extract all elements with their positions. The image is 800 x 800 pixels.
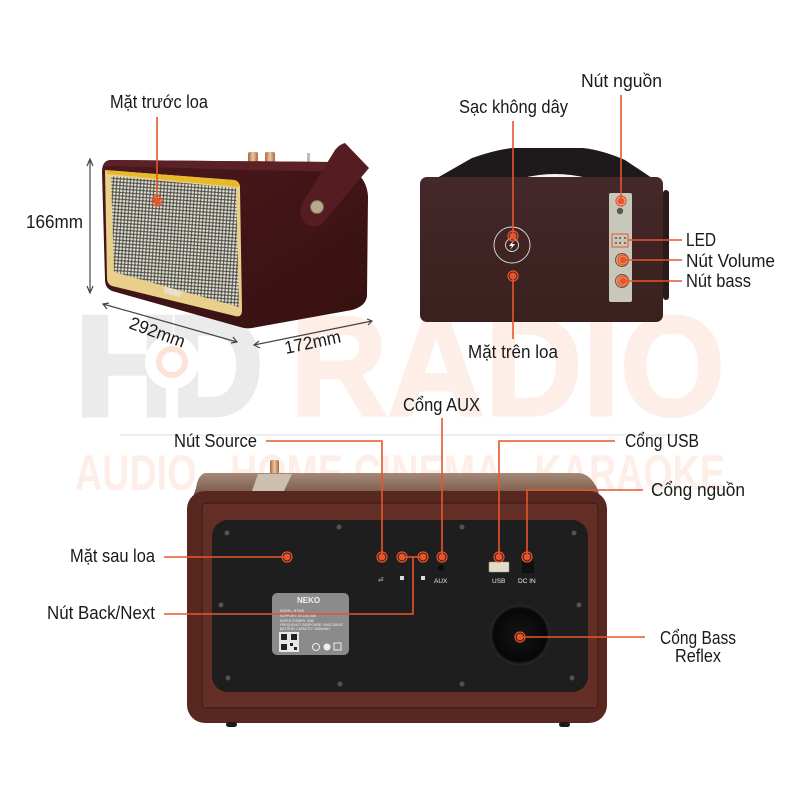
callout: Mặt trên loa xyxy=(468,271,559,362)
callout: Cổng nguồn: Cổng nguồn xyxy=(651,480,745,500)
bass reflex port xyxy=(490,605,550,665)
callout: Nút Source xyxy=(174,431,387,562)
callout: Nút bass: Nút bass xyxy=(686,271,751,291)
speaker knobs xyxy=(248,152,310,166)
callout: Nút Back/Next xyxy=(47,552,428,623)
port labels: DC IN xyxy=(518,578,536,585)
watermark: HD RADIO logo xyxy=(75,287,725,501)
callout: Cổng Bass Reflex xyxy=(515,628,736,666)
rating label: FREQUENCY RESPONSE: 20HZ-20KHZ xyxy=(280,623,343,627)
callout: Mặt trước loa xyxy=(110,92,209,206)
bass knob xyxy=(616,274,628,288)
callout: Nút nguồn xyxy=(581,71,662,206)
USB port xyxy=(489,562,509,572)
dimension: 172mm: 172mm xyxy=(283,326,343,358)
volume knob xyxy=(616,254,628,266)
panel: top view speaker xyxy=(420,148,669,322)
callout: LED xyxy=(628,230,716,250)
callout: Sạc không dây xyxy=(459,97,568,241)
callout: Sạc không dây: Sạc không dây xyxy=(459,97,568,117)
callout: Cổng AUX xyxy=(403,395,480,562)
wireless charging icon xyxy=(494,227,530,263)
callout: Nút bass xyxy=(618,271,751,291)
rear black panel xyxy=(212,520,588,692)
callout: Mặt trước loa: Mặt trước loa xyxy=(110,92,209,112)
control plate xyxy=(609,193,632,302)
speaker grill xyxy=(111,176,239,307)
NEKO badge xyxy=(163,287,181,297)
rating label xyxy=(272,593,349,655)
callout: Mặt sau loa: Mặt sau loa xyxy=(70,546,156,566)
rating label: NEKO xyxy=(297,596,320,605)
LED indicators xyxy=(615,237,626,244)
rating label: SUPPORT: 5V-1A/1.5W xyxy=(280,614,317,618)
LED box xyxy=(612,234,628,247)
DC jack xyxy=(522,561,534,573)
top view handle xyxy=(437,148,652,178)
callout: Nút Volume: Nút Volume xyxy=(686,251,775,271)
power switch xyxy=(617,208,623,214)
panel screws xyxy=(218,524,582,686)
handle screw xyxy=(310,200,324,214)
callout: Nút Back/Next: Nút Back/Next xyxy=(47,603,155,623)
leather handle xyxy=(300,143,369,227)
callout: Mặt sau loa xyxy=(70,546,292,566)
callout: Nút Volume xyxy=(618,251,775,271)
callout: LED: LED xyxy=(686,230,716,250)
rear feet xyxy=(226,722,570,727)
rear knob xyxy=(264,460,279,491)
callout: Cổng USB: Cổng USB xyxy=(625,431,699,451)
rating label: RATED POWER: 40W xyxy=(280,619,315,623)
watermark: HD RADIO logo: H xyxy=(75,287,180,446)
callout: Cổng Bass Reflex: Reflex xyxy=(675,646,721,666)
rear top cap xyxy=(192,473,600,500)
rating label: MODEL: BT330 xyxy=(280,609,304,613)
handle gap xyxy=(523,174,587,178)
top surface xyxy=(103,160,358,172)
dimension: height arrow xyxy=(87,159,93,293)
callout: Cổng USB xyxy=(494,431,699,562)
speaker body xyxy=(102,160,368,328)
dimension: width arrow xyxy=(103,303,237,343)
top view body xyxy=(420,177,663,322)
callout: Mặt trên loa: Mặt trên loa xyxy=(468,342,559,362)
rating label: BATTERY CAPACITY: 2000mAH xyxy=(280,627,330,631)
callout: Nút Source: Nút Source xyxy=(174,431,257,451)
callout: Cổng nguồn xyxy=(522,480,745,562)
port labels: AUX xyxy=(434,578,448,585)
gold trim front xyxy=(105,170,242,316)
dimension: 292mm: 292mm xyxy=(127,313,188,352)
watermark: HD RADIO logo: D xyxy=(168,287,263,446)
callout: Nút nguồn: Nút nguồn xyxy=(581,71,662,91)
knob base plate xyxy=(252,474,292,491)
panel: front view speaker xyxy=(102,143,369,328)
port labels: USB xyxy=(492,578,505,585)
port labels xyxy=(378,576,536,585)
rear body xyxy=(187,491,607,723)
dimension: depth arrow xyxy=(254,319,372,348)
panel: rear view speaker xyxy=(187,460,607,727)
callout: Cổng AUX: Cổng AUX xyxy=(403,395,480,415)
port labels: ⏎ xyxy=(378,576,384,584)
AUX jack xyxy=(438,565,444,571)
rear stitching xyxy=(202,503,598,708)
watermark: HD RADIO logo: RADIO xyxy=(290,287,725,446)
dimension: 166mm: 166mm xyxy=(26,212,83,232)
callout: Cổng Bass Reflex: Cổng Bass xyxy=(660,628,736,648)
